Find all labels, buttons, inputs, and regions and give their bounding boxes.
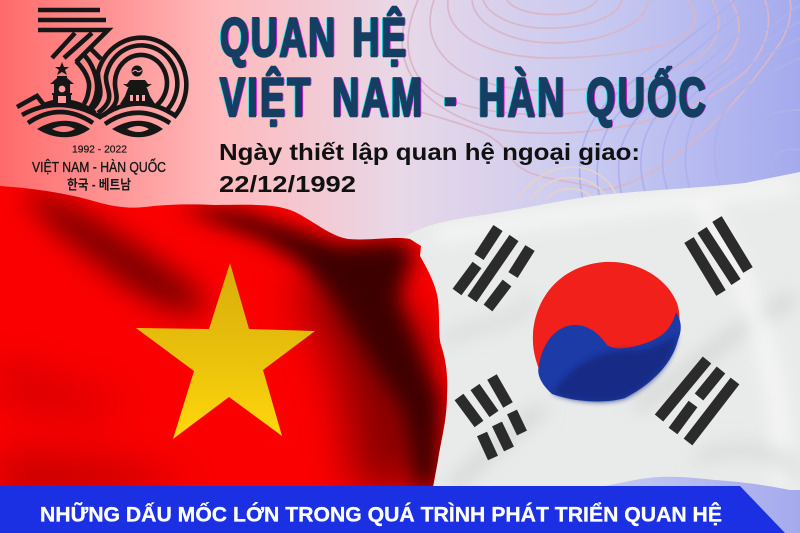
decorative contour rings [402,0,800,200]
banner text: NHỮNG DẤU MỐC LỚN TRONG QUÁ TRÌNH PHÁT TRIỂN QUAN HỆ [40,500,722,526]
logo: years: 1992 - 2022 [72,144,127,156]
subtitle line 2: 22/12/1992 [219,171,356,197]
logo: country names: VIỆT NAM - HÀN QUỐC [32,158,166,176]
subtitle line 1: Ngày thiết lập quan hệ ngoại giao: [219,139,640,165]
title line 2: VIỆT NAM - HÀN QUỐC [220,66,708,128]
icon: logo star [55,62,69,75]
icon: trigram bottom-right [659,360,735,442]
logo: 30 numeral mark [17,10,186,124]
bottom banner [0,486,785,533]
icon: trigram top-left [457,228,530,308]
Vietnamese flag [0,180,460,490]
icon: taegeuk dot [132,66,142,76]
icon: taegeuk circle [533,262,681,401]
logo: Korean text: 한국 - 베트남 [67,178,131,192]
icon: trigram top-right [689,219,748,293]
South Korean flag [400,170,800,495]
icon: clock tower [50,76,74,104]
logo: right lens [112,121,163,137]
icon: trigram bottom-left [459,377,522,458]
logo: left lens [37,121,90,137]
icon: pagoda gate [120,80,155,104]
icon: yellow star [136,263,315,439]
logo: 30th anniversary emblem [17,10,186,192]
title line 1: QUAN HỆ [220,6,408,68]
